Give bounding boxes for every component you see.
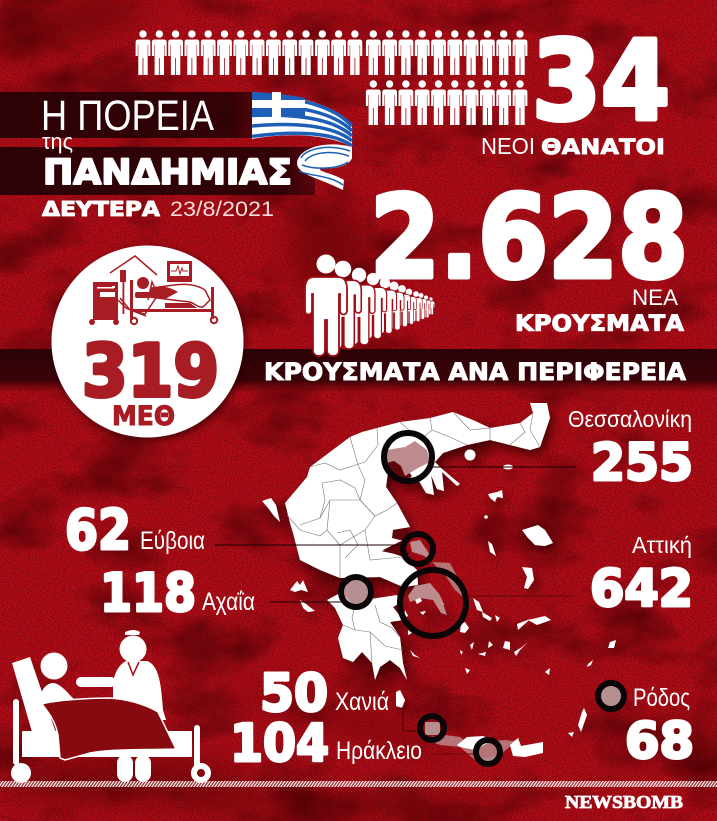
label: Attica: Αττική bbox=[632, 532, 692, 558]
ICU label: ΜΕΘ bbox=[112, 401, 175, 432]
deaths label: ΝΕΟΙ bbox=[481, 133, 535, 159]
label: Attica bbox=[590, 532, 693, 619]
date bbox=[42, 197, 274, 221]
gulf shading bbox=[381, 458, 412, 556]
deaths label bbox=[481, 133, 665, 159]
title text: ΠΑΝΔΗΜΙΑΣ bbox=[43, 153, 292, 193]
queue of people icon bbox=[305, 254, 435, 356]
label: Thessaloniki: Θεσσαλονίκη bbox=[568, 406, 692, 432]
label: Achaia: Αχαΐα bbox=[202, 588, 255, 616]
hatched ground line bbox=[0, 781, 717, 787]
title bands bbox=[0, 92, 315, 195]
region markers bbox=[341, 433, 624, 764]
title text: Η ΠΟΡΕΙΑ bbox=[41, 92, 214, 140]
ICU number: 319 bbox=[82, 329, 219, 413]
label: Heraklion: 104 bbox=[230, 714, 329, 774]
region borders bbox=[287, 412, 540, 663]
icon: ICU bed bbox=[89, 256, 217, 325]
label: Heraklion: Ηράκλειο bbox=[336, 737, 422, 765]
label: Thessaloniki: 255 bbox=[591, 434, 693, 493]
label: Evia: 62 bbox=[65, 498, 131, 562]
label: Rhodes bbox=[625, 684, 694, 770]
label: Chania: Χανιά bbox=[335, 688, 389, 716]
panel: ICU circle bbox=[52, 246, 244, 438]
label: Rhodes: Ρόδος bbox=[633, 684, 690, 712]
highlighted regions bbox=[340, 441, 622, 762]
label: Chania: 50 bbox=[260, 664, 328, 724]
region heading band bbox=[0, 349, 717, 391]
map of Greece bbox=[215, 403, 624, 764]
deaths label: ΘΑΝΑΤΟΙ bbox=[541, 135, 665, 159]
new cases label bbox=[515, 285, 684, 337]
date: 23/8/2021 bbox=[170, 198, 274, 221]
leader lines bbox=[215, 467, 576, 754]
label: Chania bbox=[260, 664, 389, 724]
new cases label: ΚΡΟΥΣΜΑΤΑ bbox=[515, 312, 684, 337]
region heading: ΚΡΟΥΣΜΑΤΑ ΑΝΑ ΠΕΡΙΦΕΡΕΙΑ bbox=[264, 358, 686, 386]
mainland bbox=[262, 403, 616, 737]
label: Achaia: 118 bbox=[100, 563, 196, 624]
title text bbox=[41, 92, 292, 193]
label: Evia bbox=[65, 498, 205, 562]
date: ΔΕΥΤΕΡΑ bbox=[42, 197, 161, 221]
label: Evia: Εύβοια bbox=[140, 527, 205, 555]
icon: nurse and patient in bed bbox=[11, 630, 208, 783]
deaths number: 34 bbox=[532, 17, 670, 145]
label: Attica: 642 bbox=[590, 560, 693, 619]
label: Rhodes: 68 bbox=[625, 712, 694, 770]
blanket bbox=[42, 698, 176, 760]
deaths pictogram: 34 people bbox=[136, 30, 527, 125]
new cases label: ΝΕΑ bbox=[632, 285, 678, 310]
label: Thessaloniki bbox=[568, 406, 693, 493]
logo: NEWSBOMB bbox=[565, 792, 683, 812]
icon: Greek flag ribbon bbox=[252, 92, 352, 190]
label: Heraklion bbox=[230, 714, 422, 774]
title text: της bbox=[42, 129, 73, 154]
Crete bbox=[422, 735, 543, 760]
